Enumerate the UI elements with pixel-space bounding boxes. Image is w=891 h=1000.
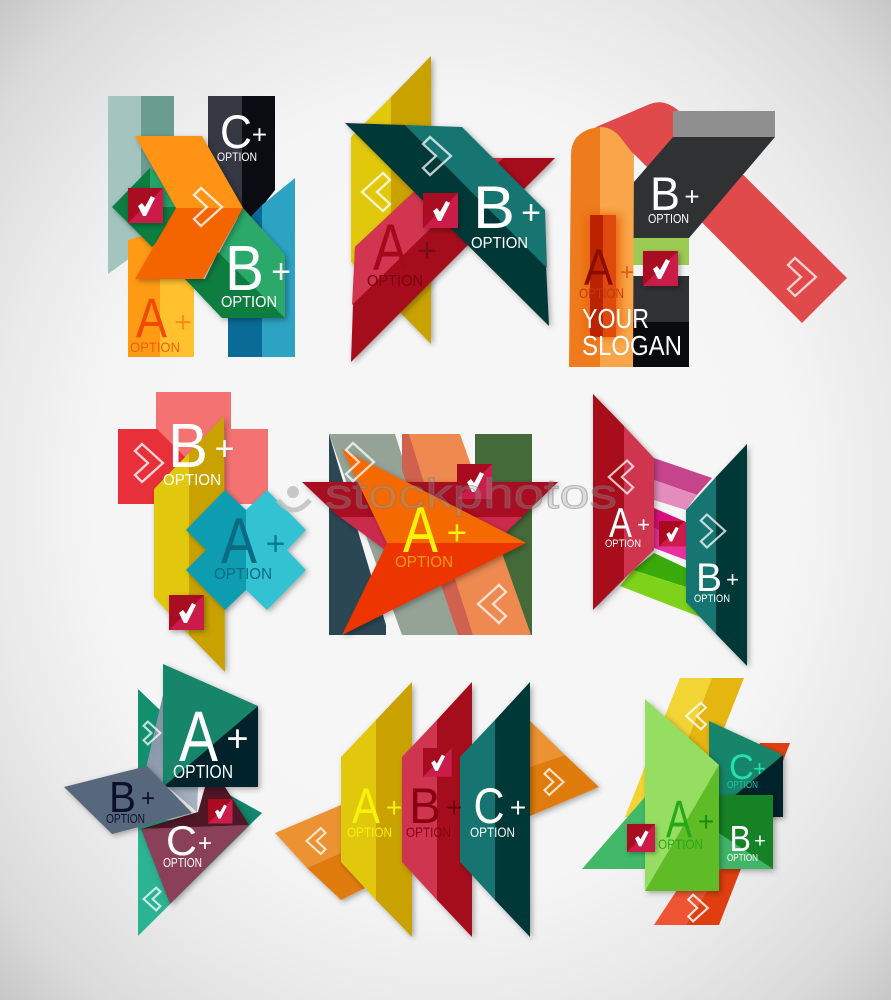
slogan: YOUR (582, 303, 649, 334)
label: B+: + (684, 182, 700, 212)
band: red-orange (654, 743, 790, 925)
icon: chevron right (423, 137, 451, 175)
parallelogram: slate B (64, 766, 192, 834)
label: B+: OPTION (406, 824, 451, 840)
blade: teal (460, 682, 530, 937)
label: A+: + (266, 525, 285, 563)
label: A+: OPTION (579, 285, 624, 301)
label: C+: C (220, 105, 252, 158)
slogan (582, 303, 682, 361)
band: dark teal (329, 434, 386, 635)
label: A+: OPTION (173, 762, 233, 782)
label: B+ (406, 778, 462, 840)
wedge: grey-blue (146, 695, 198, 812)
label: A+: + (698, 806, 714, 837)
label: C+ (217, 105, 267, 164)
icon: checkbox (169, 595, 204, 630)
label: B+ (221, 232, 291, 311)
label: C+: + (510, 792, 526, 823)
label: B+: + (521, 194, 541, 232)
hexagon: green B (185, 208, 285, 318)
label: A+ (347, 778, 402, 840)
label: A+: A (352, 778, 381, 834)
block: inner red (586, 215, 620, 337)
label: B+: + (271, 253, 291, 291)
label: C+: OPTION (727, 780, 758, 791)
label: B+: OPTION (648, 211, 689, 226)
label: B+: B (225, 232, 264, 304)
icon: chevron bottom (688, 895, 708, 921)
label: B+: OPTION (163, 472, 221, 489)
label: A+: A (373, 210, 408, 284)
icon: chevron top (686, 703, 706, 729)
icon: chevron left (306, 828, 326, 854)
label: B+: B (109, 773, 136, 822)
watermark: stockphotos (278, 470, 617, 517)
label: A+: A (609, 499, 632, 546)
panel: middle-right butterfly group (593, 394, 747, 666)
label: A+: + (637, 512, 650, 537)
band: amber A (128, 235, 194, 357)
label: B+: + (446, 792, 462, 823)
label: A+ (605, 499, 650, 550)
label: C+: C (474, 778, 504, 834)
label: B+ (471, 174, 541, 252)
label: B+ (648, 167, 700, 226)
label: A+: OPTION (605, 538, 641, 550)
label: B+: + (215, 430, 234, 468)
icon: checkbox (627, 824, 655, 852)
label: C+: + (252, 120, 267, 150)
label: B+: OPTION (221, 294, 277, 311)
label: A+: + (226, 718, 249, 760)
label: A+: OPTION (347, 824, 392, 840)
icon: checkbox (423, 748, 452, 777)
watermark: stockphotos: stockphotos (325, 470, 617, 517)
arrow: red A (351, 158, 555, 362)
panel: top-left chevron group (108, 96, 295, 357)
band: orange (569, 127, 634, 367)
icon: chevron bottom (144, 888, 160, 910)
triangle: maroon C (141, 787, 249, 904)
wing: red A (593, 394, 654, 610)
banner: red (302, 482, 558, 552)
stripes: green (620, 553, 700, 617)
label: B+: B (696, 556, 722, 600)
icon: checkbox (128, 188, 163, 223)
icon: chevron right (544, 769, 564, 795)
label: A+: OPTION (395, 554, 453, 571)
icon: chevron (788, 258, 816, 296)
icon: chevron (135, 444, 163, 482)
label: A+ (367, 210, 437, 290)
band: orange (402, 434, 531, 635)
label: A+: OPTION (214, 566, 272, 583)
label: A+ (579, 239, 634, 301)
label: A+: OPTION (658, 836, 703, 852)
triangle: small green (138, 689, 160, 770)
icon: chevron (194, 188, 222, 226)
icon: chevron bottom (478, 585, 506, 623)
panel: middle-left cross group (118, 392, 306, 672)
blade: yellow (341, 682, 412, 937)
label: A+: + (417, 232, 437, 270)
label: B+ (694, 556, 739, 605)
arrow: orange star (342, 449, 526, 635)
label: C+: + (198, 830, 212, 857)
panel: bottom-right green group (582, 678, 790, 925)
panel: top-middle arrow group (345, 56, 555, 362)
label: B+: OPTION (471, 235, 528, 252)
icon: checkbox (423, 193, 458, 228)
label: C+: C (166, 817, 197, 864)
label: A+: A (136, 286, 168, 349)
label: C+ (163, 817, 212, 870)
icon: checkbox (208, 799, 232, 824)
label: A+: + (386, 792, 402, 823)
label: A+ (173, 698, 249, 782)
panel: middle star arrow group (302, 434, 558, 635)
arrow: orange right (530, 721, 599, 816)
triangle: green right (215, 787, 262, 825)
cross: pink and red (118, 392, 268, 504)
label: A+: A (403, 493, 439, 566)
band: grey (329, 434, 458, 635)
icon: chevron left (609, 460, 633, 494)
band: dark C (208, 96, 275, 222)
blade: red (402, 682, 472, 937)
icon: chevron top (144, 722, 160, 744)
label: B+: B (730, 818, 751, 859)
label: B+: + (754, 830, 766, 852)
label: A+: + (174, 306, 192, 339)
square: green B (719, 795, 773, 869)
label: B+ (727, 818, 766, 864)
cross: teal diamonds (186, 490, 306, 610)
band: green (475, 434, 532, 635)
stripes: pink (654, 458, 712, 560)
label: A+ (130, 286, 192, 355)
icon: chevron left (362, 173, 390, 211)
triangle: green (582, 797, 645, 869)
block: lower dark (633, 276, 689, 367)
panel: top-right slogan group (569, 102, 847, 367)
icon: checkbox (659, 521, 685, 547)
icon: chevron top (346, 443, 374, 481)
band: yellow (625, 678, 744, 817)
label: B+: + (726, 567, 739, 592)
band: grey-green (108, 96, 174, 274)
arrow: yellow (154, 416, 225, 672)
band: blue (228, 178, 295, 357)
panel: bottom-left triangles group (64, 664, 262, 936)
label: C+ (470, 778, 526, 840)
block: green strip (633, 238, 689, 265)
label: C+: OPTION (470, 824, 515, 840)
label: B+: B (168, 412, 208, 481)
band: orange shade (402, 434, 473, 635)
slogan: SLOGAN (582, 330, 682, 361)
label: A+: A (179, 698, 219, 777)
band: yellow (351, 56, 431, 344)
label: A+: OPTION (367, 273, 423, 290)
label: A+: A (221, 504, 258, 577)
label: A+: OPTION (130, 339, 180, 355)
icon: chevron right (701, 514, 725, 548)
label: C+ (727, 748, 766, 791)
wing: teal B (686, 444, 747, 666)
label: A+: A (584, 239, 613, 296)
label: C+: OPTION (217, 150, 257, 164)
label: A+: A (666, 790, 692, 849)
label: B+: OPTION (106, 811, 145, 826)
label: A+ (395, 493, 467, 571)
label: B+: B (409, 778, 441, 834)
block: grey (673, 111, 775, 137)
shape: light green A (645, 699, 719, 891)
label: B+: OPTION (694, 593, 730, 605)
label: B+: B (650, 167, 680, 220)
block: dark B (633, 137, 775, 238)
label: A+ (214, 504, 285, 583)
chevron arrow: orange (135, 136, 243, 279)
label: B+: B (473, 174, 515, 241)
label: B+: + (141, 785, 155, 812)
label: B+: OPTION (727, 853, 758, 864)
band: red (596, 102, 847, 323)
arrow: teal B (345, 123, 549, 326)
icon: checkbox (457, 464, 492, 499)
label: C+: OPTION (163, 855, 202, 870)
label: A+: + (447, 514, 467, 552)
triangle: teal lower (138, 813, 262, 936)
triangle: teal C (709, 721, 783, 817)
label: C+: + (753, 756, 766, 781)
label: C+: C (729, 748, 754, 787)
icon: checkbox (643, 251, 678, 286)
arrow: orange left (275, 805, 365, 900)
diamond: green (112, 168, 190, 247)
label: B+ (163, 412, 234, 489)
label: A+ (658, 790, 714, 852)
triangle: green A (163, 664, 258, 787)
label: A+: + (620, 259, 634, 286)
panel: bottom-middle three blades group (275, 682, 599, 937)
label: B+ (106, 773, 155, 826)
